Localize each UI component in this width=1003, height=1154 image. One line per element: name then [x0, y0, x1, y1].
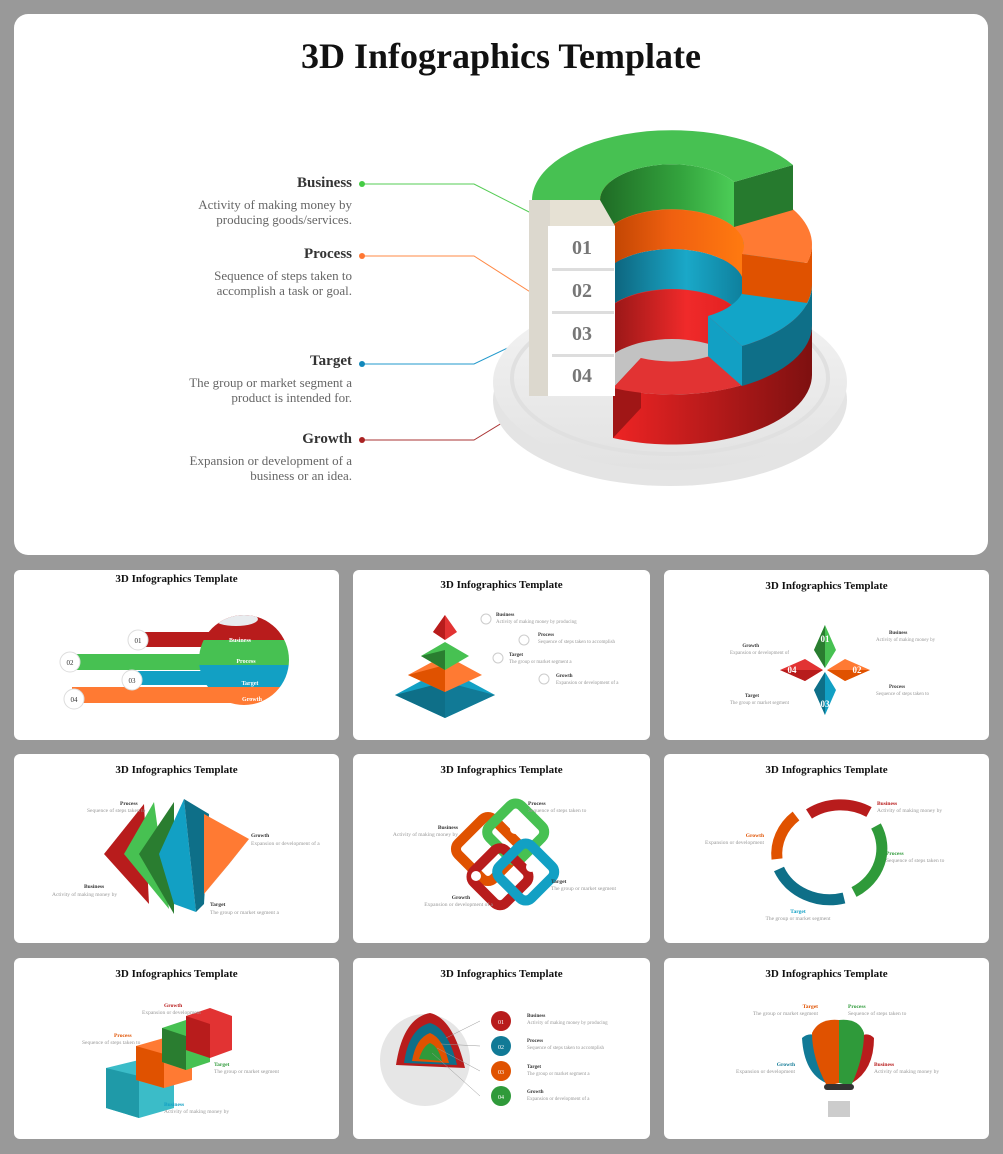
thumb 8: earth layers: Expansion or development of a [527, 1097, 590, 1102]
thumb 5: rings: Activity of making money by [393, 831, 458, 838]
thumb 3: cross: Business [889, 631, 907, 636]
thumb 8: earth layers: Growth [527, 1090, 544, 1095]
label: growth: Expansion or development of a [190, 453, 352, 468]
thumb 6: cycle [664, 754, 989, 943]
thumb 8: earth layers: 01 [498, 1020, 504, 1026]
thumb 2: pyramid: Growth [556, 674, 573, 679]
thumb 3: cross: The group or market segment [730, 701, 790, 706]
thumb 4: prism: Target [210, 902, 226, 908]
thumb 8: earth layers: 03 [498, 1070, 504, 1076]
thumb 7: cubes: Activity of making money by [164, 1108, 229, 1115]
thumb 3: cross: 01 [820, 634, 830, 644]
thumb 8: earth layers: Activity of making money by producing [527, 1021, 608, 1026]
thumb 7: cubes: Growth [164, 1003, 182, 1009]
thumb 1: sphere: 04 [70, 696, 78, 704]
thumb 5: rings: Process [528, 801, 546, 807]
thumb 6: cycle: Process [886, 851, 904, 857]
thumb 2: pyramid [353, 570, 650, 740]
thumb 3: cross: Target [745, 694, 759, 699]
thumb 7: cubes: The group or market segment [214, 1069, 280, 1075]
thumb 3: cross: Process [889, 685, 905, 690]
thumb 1: sphere: Target [242, 681, 258, 687]
thumb 1: sphere: Business [229, 638, 252, 644]
thumb 8: earth layers: Business [527, 1014, 545, 1019]
thumb 9: balloon: Growth [777, 1062, 795, 1068]
thumb 1: sphere: 3D Infographics Template [115, 573, 238, 585]
thumb 4: prism: The group or market segment a [210, 910, 279, 916]
thumb 1: sphere [14, 570, 339, 740]
thumb 7: cubes [14, 958, 339, 1139]
label: process [214, 246, 352, 298]
thumb 3: cross: Growth [742, 644, 759, 649]
thumb 7: cubes: Business [164, 1102, 184, 1108]
thumb 1: sphere: Process [236, 659, 256, 665]
thumb 6: cycle: 3D Infographics Template [765, 764, 888, 776]
thumb 6: cycle: Target [790, 909, 806, 915]
number column: 01 [572, 237, 592, 259]
thumb 5: rings: Business [438, 825, 458, 831]
thumb 3: cross [664, 570, 989, 740]
thumb 7: cubes: Process [114, 1033, 132, 1039]
thumb 4: prism: Expansion or development of a [251, 840, 320, 847]
label: target: Target [310, 353, 352, 369]
thumb 8: earth layers: Sequence of steps taken to accomplish [527, 1046, 605, 1051]
orange layer [532, 174, 812, 303]
label: business [198, 175, 352, 227]
thumb 5: rings: Growth [452, 895, 470, 901]
thumb 4: prism: 3D Infographics Template [115, 764, 238, 776]
thumb 8: earth layers: 04 [498, 1095, 504, 1101]
number column: 03 [572, 323, 592, 345]
thumb 9: balloon: Business [874, 1062, 894, 1068]
red layer [532, 255, 812, 445]
thumb 3: cross: 03 [820, 699, 830, 709]
thumb 2: pyramid: Target [509, 653, 523, 658]
thumb 5: rings: Target [551, 879, 567, 885]
thumb 8: earth layers: Target [527, 1065, 541, 1070]
thumb 9: balloon: Sequence of steps taken to [848, 1010, 907, 1017]
label: growth: Growth [302, 431, 352, 447]
thumb 2: pyramid: Activity of making money by producing [496, 620, 577, 625]
label: target [189, 353, 352, 405]
thumb 6: cycle: The group or market segment [765, 916, 831, 922]
thumb 2: pyramid: Expansion or development of a [556, 681, 619, 686]
thumb 5: rings [353, 754, 650, 943]
thumb 3: cross: Sequence of steps taken to [876, 692, 930, 697]
thumb 6: cycle: Business [877, 801, 897, 807]
thumb 4: prism: Process [120, 801, 138, 807]
thumb 1: sphere: Growth [242, 697, 263, 703]
title: 3D Infographics Template [301, 36, 701, 76]
thumb 5: rings: Expansion or development of a [424, 901, 494, 908]
thumb 6: cycle: Growth [746, 833, 764, 839]
thumb 9: balloon: Activity of making money by [874, 1068, 939, 1075]
thumb 4: prism: Sequence of steps taken to [87, 807, 146, 814]
label: process: accomplish a task or goal. [217, 283, 352, 298]
thumb 8: earth layers [353, 958, 650, 1139]
thumb 3: cross: Expansion or development of [730, 651, 789, 656]
thumb 4: prism: Activity of making money by [52, 891, 117, 898]
connector lines [362, 184, 548, 440]
thumb 1: sphere: 01 [134, 637, 142, 645]
thumb 5: rings: Sequence of steps taken to [528, 807, 587, 814]
label: business: Activity of making money by [198, 197, 352, 212]
label: growth: business or an idea. [250, 468, 352, 483]
thumb 6: cycle: Sequence of steps taken to [886, 857, 945, 864]
thumb 8: earth layers: The group or market segment a [527, 1072, 590, 1077]
thumb 8: earth layers: 02 [498, 1045, 504, 1051]
thumb 6: cycle: Expansion or development [705, 840, 764, 846]
thumb 7: cubes: 3D Infographics Template [115, 968, 238, 980]
thumb 5: rings: 3D Infographics Template [440, 764, 563, 776]
label: process: Process [304, 246, 352, 262]
blue layer [532, 215, 812, 386]
thumb 2: pyramid: Process [538, 633, 554, 638]
label: business: producing goods/services. [216, 212, 352, 227]
label: target: The group or market segment a [189, 375, 352, 390]
number column [529, 200, 615, 396]
main panel [14, 14, 988, 555]
thumb 8: earth layers: Process [527, 1039, 543, 1044]
thumb 3: cross: 04 [788, 665, 797, 675]
thumb 9: balloon: Expansion or development [736, 1069, 795, 1075]
thumb 9: balloon: The group or market segment [753, 1011, 818, 1017]
thumb 9: balloon: Target [803, 1004, 818, 1010]
thumb 8: earth layers: 3D Infographics Template [440, 968, 563, 980]
thumb 2: pyramid: Business [496, 613, 514, 618]
thumb 1: sphere: 02 [66, 659, 74, 667]
thumb 2: pyramid: The group or market segment a [509, 660, 572, 665]
thumb 2: pyramid: 3D Infographics Template [440, 579, 563, 591]
number column: 02 [572, 280, 592, 302]
label: target: product is intended for. [231, 390, 352, 405]
label: process: Sequence of steps taken to [214, 268, 352, 283]
thumb 4: prism: Business [84, 884, 104, 890]
green layer [532, 130, 793, 245]
thumb 7: cubes: Expansion or development [142, 1010, 201, 1016]
thumb 3: cross: 3D Infographics Template [765, 580, 888, 592]
thumb 7: cubes: Target [214, 1062, 230, 1068]
3d ring chart [359, 130, 847, 486]
number column: 04 [572, 365, 592, 387]
thumb 6: cycle: Activity of making money by [877, 807, 942, 814]
thumb 9: balloon: 3D Infographics Template [765, 968, 888, 980]
platform [493, 294, 847, 486]
label: business: Business [297, 175, 352, 191]
label: growth [190, 431, 352, 483]
thumb 4: prism: Growth [251, 833, 269, 839]
thumb 3: cross: 02 [852, 665, 862, 675]
thumb 4: prism [14, 754, 339, 943]
thumb 3: cross: Activity of making money by [876, 638, 936, 643]
thumb 9: balloon [664, 958, 989, 1139]
thumb 5: rings: The group or market segment [551, 886, 617, 892]
thumb 1: sphere: 03 [128, 677, 136, 685]
thumb 2: pyramid: Sequence of steps taken to accomplish [538, 640, 616, 645]
thumb 9: balloon: Process [848, 1004, 866, 1010]
thumb 7: cubes: Sequence of steps taken to [82, 1039, 141, 1046]
